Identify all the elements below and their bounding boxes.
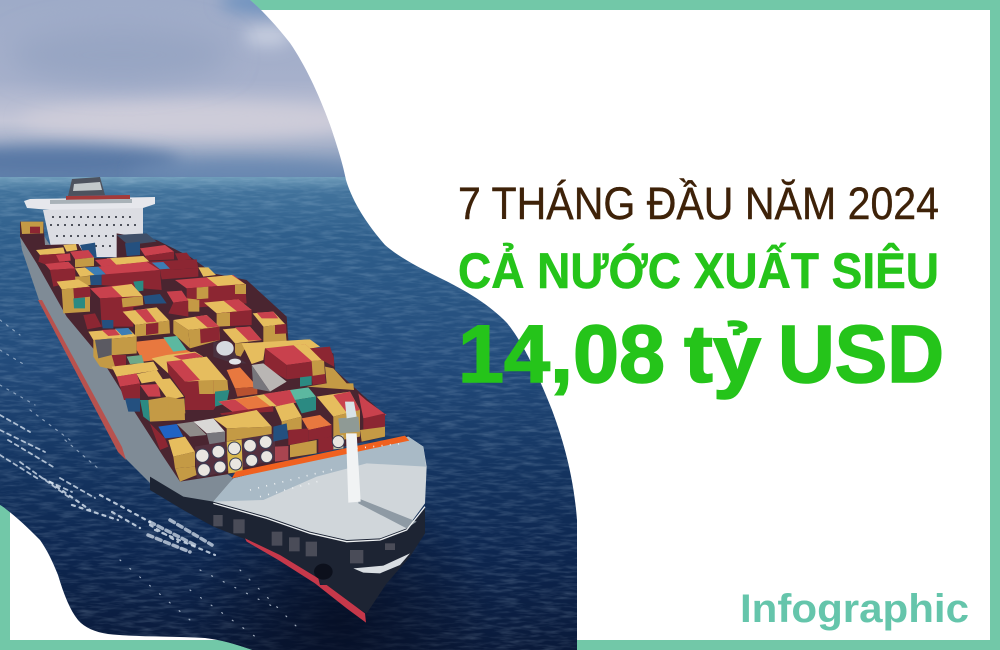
headline figure bbox=[458, 309, 944, 400]
photo: container ship at sea bbox=[0, 0, 600, 650]
bow hull bbox=[150, 477, 425, 613]
mast bbox=[338, 402, 361, 503]
mast shadow bbox=[358, 498, 417, 528]
sea bbox=[0, 177, 600, 650]
deck bolts bbox=[250, 443, 403, 497]
deck railing bbox=[213, 503, 425, 542]
label: Infographic: Infographic bbox=[740, 587, 969, 631]
headline figure: tỷ bbox=[684, 309, 761, 400]
ship hull side bbox=[20, 230, 233, 505]
heading line 2: CẢ NƯỚC XUẤT SIÊU bbox=[458, 243, 939, 299]
ship bow bbox=[150, 402, 427, 623]
foredeck bbox=[213, 437, 427, 540]
ship hull waterline bbox=[38, 300, 126, 460]
sea foam bbox=[0, 320, 300, 640]
bow white stripes bbox=[353, 553, 410, 573]
cargo tanks bbox=[196, 436, 344, 476]
heading line 1: 7 THÁNG ĐẦU NĂM 2024 bbox=[458, 178, 939, 229]
stern block bbox=[21, 222, 43, 234]
sky with clouds bbox=[0, 0, 360, 181]
hull windows bbox=[213, 515, 395, 563]
foredeck raised shaded section bbox=[213, 437, 426, 502]
bottom-left green corner bbox=[0, 505, 252, 650]
orange strip bbox=[232, 436, 409, 478]
ship: rear superstructure bbox=[24, 177, 155, 258]
red hull waterline bbox=[245, 538, 366, 623]
cargo containers bbox=[20, 222, 387, 482]
headline figure: USD bbox=[778, 309, 944, 400]
headline figure: 14,08 bbox=[458, 309, 665, 400]
